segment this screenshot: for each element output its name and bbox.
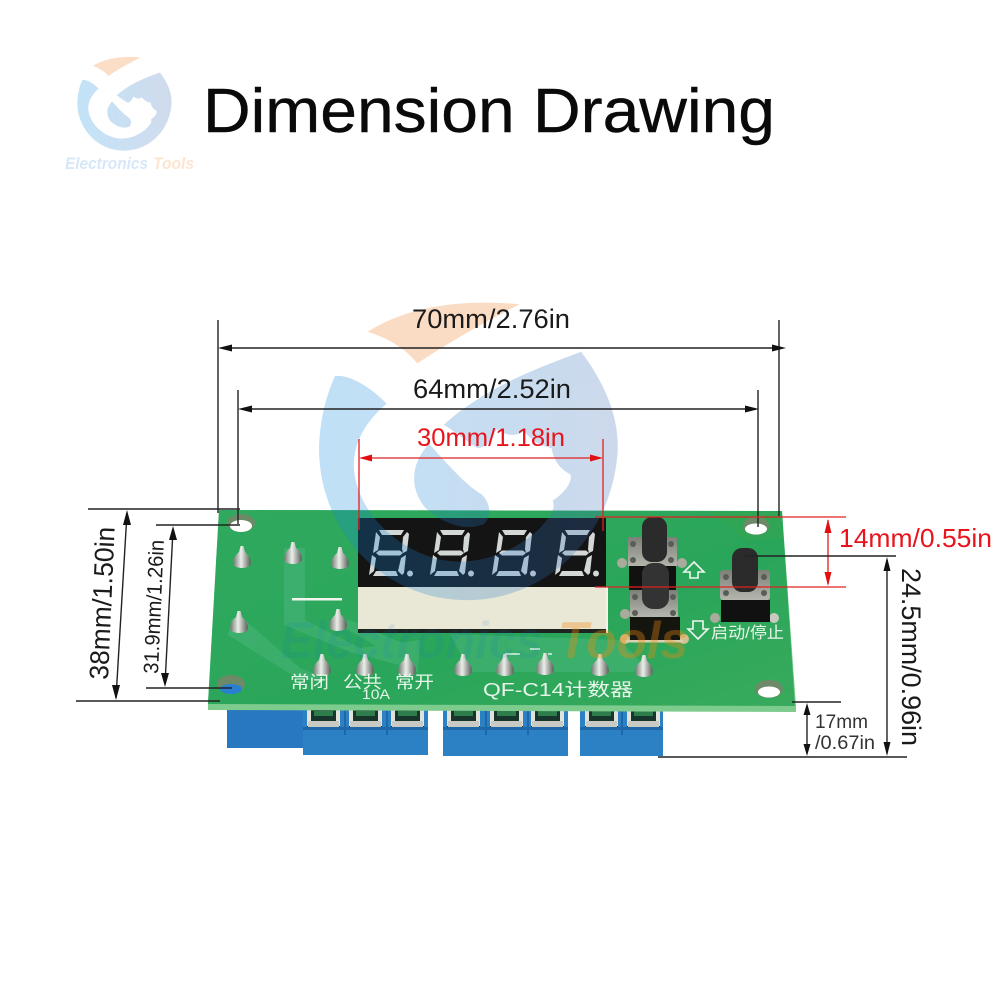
large central watermark: Tools: [558, 612, 688, 670]
dimension: 64mm hole spacing: 64mm/2.52in: [413, 374, 571, 404]
logo: Electronics Tools watermark: [65, 57, 194, 173]
circuit board photo: [208, 510, 796, 756]
push buttons: [617, 517, 779, 644]
terminal blocks: [227, 705, 663, 756]
dimension: 70mm width: 70mm/2.76in: [412, 304, 570, 334]
solder pins: [230, 542, 653, 677]
title: Dimension Drawing: [203, 77, 775, 146]
silkscreen arrows: [684, 562, 708, 639]
dimension: 64mm hole spacing: [238, 374, 759, 527]
dimension: 17mm: [792, 702, 875, 756]
silkscreen labels: 启动/停止: [711, 624, 784, 642]
PCB: [208, 510, 796, 712]
dimension: 17mm: /0.67in: [815, 733, 875, 754]
dimension: 30mm display width: [359, 424, 603, 531]
logo: Electronics Tools watermark: Tools: [153, 154, 194, 173]
mounting holes: [217, 514, 783, 698]
dimension: 14mm button spacing: [595, 517, 992, 587]
large central watermark: Electronics: [280, 612, 543, 670]
dimension: 38mm height: 38mm/1.50in: [84, 526, 121, 680]
copper traces: [228, 548, 650, 680]
logo: Electronics Tools watermark: Electronics: [65, 154, 148, 173]
dimension: 38mm height: [76, 509, 240, 701]
dimension: 17mm: 17mm: [815, 712, 868, 733]
dimension: 31.9mm hole spacing: [140, 525, 240, 688]
dimension: 14mm button spacing: 14mm/0.55in: [839, 523, 992, 553]
dimension: 31.9mm hole spacing: 31.9mm/1.26in: [140, 539, 169, 674]
silkscreen labels: 常闭: [290, 673, 329, 692]
LED display: [358, 518, 608, 633]
dimension: 24.5mm: [658, 556, 926, 757]
silkscreen labels: [290, 624, 784, 702]
large central watermark: [280, 303, 688, 670]
silkscreen labels: QF-C14计数器: [483, 680, 633, 700]
dimension: 70mm width: [218, 304, 786, 516]
silkscreen labels: 10A: [362, 686, 391, 702]
silkscreen labels: 常开: [395, 673, 434, 692]
dimension: 24.5mm: 24.5mm/0.96in: [896, 568, 926, 746]
silkscreen labels: 公共: [343, 673, 382, 692]
dimension: 30mm display width: 30mm/1.18in: [417, 424, 565, 452]
